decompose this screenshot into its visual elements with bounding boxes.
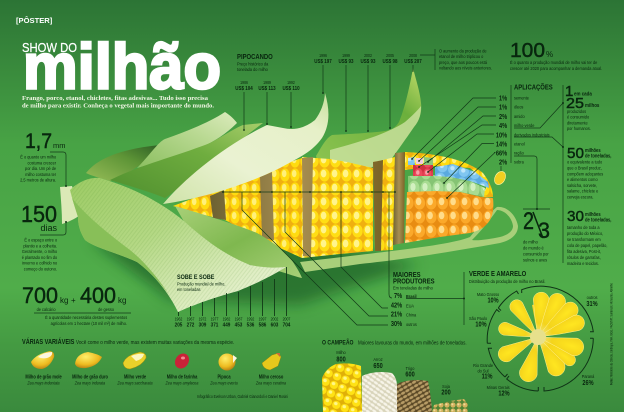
chart: maiores produtores: 21% <box>391 311 402 319</box>
section: o campeão: 650 <box>373 362 383 370</box>
kernel: pipoca: Pipoca <box>218 374 231 380</box>
kernel: grão mole: Zea mays indentata <box>26 380 60 386</box>
chart: pipocando price history: 2002 <box>364 53 372 58</box>
chart: pipocando price history: tonelada do milho <box>237 67 268 72</box>
chart: maiores produtores: 42% <box>391 302 402 310</box>
left fact: 150 dias: plantio e a colheita. <box>23 243 57 248</box>
loose kernel <box>492 169 508 187</box>
text: etanol note <box>420 48 492 71</box>
left fact: 150 dias: é plantado no fim do <box>22 254 58 260</box>
chart: pipocando price history: PIPOCANDO <box>237 53 273 61</box>
left fact: calcário e gesso: kg <box>60 296 68 305</box>
kernel: grão duro: Milho de grão duro <box>72 374 108 380</box>
fact: 1 em cada 25: por humanos. <box>567 126 591 131</box>
section: várias variáveis: VÁRIAS VARIÁVEIS <box>22 336 74 346</box>
chart: pipocando price history: US$ 93 <box>361 59 376 65</box>
fact: 50 milhões: cerveja escura. <box>567 194 593 200</box>
chart: sobe e sobe: 2002 <box>271 316 278 321</box>
fact: 30 milhões: produção do México, <box>567 231 603 236</box>
chart: sobe e sobe: em toneladas <box>177 287 201 292</box>
fact: 1 em cada 25: milhos <box>585 103 600 109</box>
leaf: upper <box>137 112 237 168</box>
kernel: milho verde: Zea mays saccharata <box>117 380 153 386</box>
left fact: 150 dias <box>21 201 67 272</box>
state labels: 31% <box>586 300 598 308</box>
chart: pipocando price history: 2005 <box>386 53 395 58</box>
left fact: 150 dias: É o espaço entre o <box>24 236 58 243</box>
chart: aplicações: 1% <box>499 95 507 103</box>
text: etanol note: preço, que aos poucos está <box>439 59 487 65</box>
stat: 100%: É o quanto a produção mundial de milho vai ter de <box>510 58 598 65</box>
chart: sobe e sobe: 1992 <box>247 316 254 321</box>
state labels: 26% <box>582 379 594 387</box>
state labels: Rio Grande <box>473 363 494 368</box>
chart: aplicações: óleos <box>514 104 524 110</box>
subtitle: Frango, porco, etanol, chicletes, fitas adesivas... Tudo isso precisa <box>22 95 208 102</box>
fact: 50 milhões: que o Brasil produz, <box>567 165 602 171</box>
fact: 30 milhões: de toneladas, <box>585 217 611 223</box>
colored section: kernels by use <box>405 152 493 197</box>
section: o campeão: Soja <box>442 384 450 389</box>
kernel: grão mole <box>25 351 62 386</box>
chart: maiores produtores: Em toneladas de milho <box>393 285 433 291</box>
chart: sobe e sobe: 704 <box>283 322 290 329</box>
left fact: calcário e gesso <box>22 283 131 326</box>
kernel: pipoca <box>209 354 238 386</box>
fact: 50 milhões: compõem adoçantes <box>567 171 604 176</box>
corn illustration <box>60 68 518 312</box>
stat: 2/3: do milho <box>523 239 538 245</box>
shadow <box>90 240 420 305</box>
chart: maiores produtores: outros <box>406 322 418 327</box>
husk strips <box>210 157 383 257</box>
leader lines <box>223 192 464 325</box>
chart: aplicações: amido <box>514 113 525 119</box>
chart: pipocando price history: US$ 110 <box>282 86 300 92</box>
left fact: 1,7 mm: mm <box>53 141 66 150</box>
chart: sobe e sobe: 309 <box>199 322 206 329</box>
section: várias variáveis: Você come o milho verde, mas existem muitas variações da mesma espécie. <box>76 340 234 346</box>
chart: maiores produtores: MAIORES <box>393 271 421 279</box>
fact: 30 milhões: milhões <box>585 212 601 217</box>
subtitle <box>22 95 214 110</box>
chart: sobe e sobe: 603 <box>271 322 278 329</box>
chart: pipocando price history: 1999 <box>342 53 351 58</box>
chart: maiores produtores: 7% <box>394 292 402 300</box>
chart: pipocando price history: 1992 <box>287 80 295 85</box>
section: várias variáveis <box>22 336 287 386</box>
state labels: 12% <box>498 390 510 398</box>
section: o campeão: Milho <box>336 350 346 355</box>
credits: Infográfico Evelson Urban, Gabriel Gianordoli e Daniel Rosini <box>197 395 288 399</box>
flower petals <box>495 290 587 384</box>
chart: aplicações: APLICAÇÕES <box>514 82 553 92</box>
chart: sobe e sobe: 1982 <box>223 316 230 321</box>
chart: sobe e sobe: 272 <box>187 322 194 329</box>
left fact: calcário e gesso: 700 <box>22 283 58 308</box>
left fact: 1,7 mm <box>20 130 67 187</box>
kernel: grão duro: Zea mays indurata <box>74 380 106 386</box>
chart: sobe e sobe: 586 <box>259 322 266 329</box>
pile: arroz <box>362 372 397 412</box>
left fact: 150 dias: dias <box>40 223 57 233</box>
chart: aplicações <box>411 82 564 209</box>
state labels: Minas Gerais <box>487 385 510 390</box>
pile: milho <box>322 363 362 412</box>
left fact: calcário e gesso: É a quantidade necessária destes suplementos <box>45 313 128 320</box>
left fact: 1,7 mm: 1,7 <box>25 130 52 153</box>
chart: pipocando price history: Preço histórico da <box>237 61 269 67</box>
fact: 50 milhões <box>567 146 611 200</box>
section: o campeão: Trigo <box>406 366 415 371</box>
text: etanol note: etanol de milho triplicou o <box>439 54 484 59</box>
state labels: São Paulo <box>469 316 488 321</box>
subtitle: de milho para existir. Conheça o vegetal mais importante do mundo. <box>22 102 214 110</box>
fact: 30 milhões: 30 <box>567 209 584 225</box>
radial ring <box>487 286 593 391</box>
chart: sobe e sobe: 453 <box>235 322 242 329</box>
fact: 1 em cada 25: diretamente <box>567 120 588 126</box>
left fact: 1,7 mm: por dia. Um pé de <box>25 166 57 171</box>
left fact: 1,7 mm: 2,5 metros de altura. <box>20 177 56 183</box>
chart: pipocando price history <box>235 53 422 132</box>
tag: pôster: [PÔSTER] <box>16 16 53 25</box>
chart: pipocando price history: US$ 113 <box>258 86 276 92</box>
left fact: calcário e gesso: kg <box>118 296 126 305</box>
state labels <box>469 292 598 398</box>
section: o campeão: O CAMPEÃO <box>322 339 354 347</box>
kernel: cerosa: Zea mays ceratina <box>255 380 287 386</box>
left fact: 150 dias: inverno e colhido no <box>22 260 58 266</box>
left fact: calcário e gesso: de gesso <box>98 307 114 312</box>
leaf: top pale husk <box>163 93 328 204</box>
kernel: farinha: Milho de farinha <box>167 374 198 380</box>
kernel: grão mole: Milho de grão mole <box>25 374 62 380</box>
chart: aplicações: 1% <box>499 104 507 112</box>
fact: 1 em cada 25: em cada <box>574 91 592 98</box>
section: o campeão: 200 <box>441 389 451 397</box>
left fact: calcário e gesso: de calcário <box>37 307 56 312</box>
state labels: 10% <box>475 321 487 329</box>
main title: milhão <box>23 30 221 102</box>
stat: 100%: 100 <box>510 40 545 62</box>
fact: 50 milhões: de toneladas, <box>585 153 611 159</box>
left fact: calcário e gesso: agrícolas em 1 hectare (10 mil m²) de milho. <box>51 321 127 326</box>
chart: aplicações: 4% <box>499 122 507 130</box>
title block <box>22 30 221 110</box>
chart: maiores produtores <box>222 191 465 328</box>
fact: 50 milhões: salsicha, sorvete, <box>567 182 597 188</box>
chart: sobe e sobe: 371 <box>211 322 218 329</box>
text: etanol note: voltando aos níveis anteriores. <box>439 65 492 71</box>
chart: pipocando price history: US$ 197 <box>314 59 332 65</box>
left fact: 1,7 mm: É o quanto um milho <box>20 153 57 160</box>
chart: verde e amarelo: VERDE E AMARELO <box>469 270 526 278</box>
kernel: cerosa <box>255 353 287 386</box>
stat: 100%: crescer até 2020 para acompanhar a demanda atual. <box>510 66 602 71</box>
kernel: pipoca: Zea mays everta <box>209 380 238 386</box>
chart: pipocando price history: 1989 <box>263 80 272 85</box>
chart: aplicações: derivados industriais <box>514 132 550 137</box>
chart: aplicações: 66% <box>496 150 507 158</box>
chart: sobe e sobe: 1987 <box>235 316 242 321</box>
state labels: 10% <box>487 297 499 305</box>
chart: sobe e sobe: Produção mundial de milho, <box>177 281 225 286</box>
stat: 2/3 <box>523 208 550 263</box>
left fact: 150 dias: 150 <box>21 201 57 227</box>
chart: aplicações: etanol <box>514 141 525 147</box>
state labels: 11% <box>482 373 493 381</box>
section: o campeão <box>322 339 468 412</box>
chart: maiores produtores: 30% <box>391 320 402 328</box>
fact: 1 em cada 25: 25 <box>566 95 584 112</box>
leaf: main front <box>70 178 286 312</box>
chart: aplicações: 2% <box>499 113 507 121</box>
stat: 2/3: consumido por <box>523 251 549 257</box>
stat: 2/3: suínos e aves <box>523 257 548 263</box>
chart: sobe e sobe: 449 <box>223 322 230 329</box>
fact: 50 milhões: 50 <box>567 146 584 162</box>
fact: 30 milhões: tamanho de toda a <box>567 225 600 230</box>
fact: 50 milhões: milhões <box>585 148 601 153</box>
fact: 50 milhões: e alimentos como <box>567 177 598 182</box>
chart: maiores produtores: PRODUTORES <box>393 278 435 286</box>
kernel: milho verde <box>117 352 153 386</box>
fact: 50 milhões: salame, chiclete e <box>567 188 599 194</box>
chart: sobe e sobe <box>175 267 290 329</box>
chart: sobe e sobe: 536 <box>247 322 254 329</box>
stat: 100%: % <box>546 50 553 59</box>
chart: sobe e sobe: 1997 <box>259 316 266 321</box>
leader lines <box>412 98 501 198</box>
left fact: 1,7 mm: costuma crescer <box>27 160 57 165</box>
leaf: back right <box>316 68 421 168</box>
chart: sobe e sobe: 2007 <box>283 316 290 321</box>
leaf: dark rear <box>86 145 160 181</box>
fact: 50 milhões: o equivalente a tudo <box>567 159 603 165</box>
fact: 30 milhões: fita adesiva, Post-it, <box>567 249 601 254</box>
fact: 30 milhões: se transformam em <box>567 237 601 242</box>
fact: 30 milhões: rótulos de garrafas, <box>567 255 601 260</box>
state labels: do Sul <box>477 368 489 373</box>
state labels: Paraná <box>582 374 595 379</box>
chart: verde e amarelo <box>464 270 598 398</box>
chart: pipocando price history: US$ 98 <box>383 59 398 65</box>
chart: sobe e sobe: 205 <box>175 322 182 329</box>
chart: aplicações: 2% <box>499 159 507 167</box>
chart: sobe e sobe: 1977 <box>211 316 218 321</box>
fact: 1 em cada 25: é consumido <box>567 114 590 120</box>
source note: Fonte: Ministério da Ciência, Embrapa, IMA, IBGE, FAOSTAT, Sumbrasil, Monsanto, Abimilho <box>608 283 614 385</box>
right column facts <box>563 83 611 266</box>
ear of corn <box>173 152 493 258</box>
fact: 1 em cada 25: 1 <box>565 83 573 100</box>
chart: pipocando price history: US$ 104 <box>235 86 253 92</box>
chart: verde e amarelo: Distribuição da produção de milho no Brasil. <box>469 279 545 284</box>
kernel: farinha: Zea mays amylacea <box>165 380 199 386</box>
leaf: lower cover <box>175 206 302 278</box>
stat: 2/3: do mundo é <box>523 245 544 251</box>
left fact: calcário e gesso: 400 <box>80 283 116 308</box>
left fact: 150 dias: Geralmente, o milho <box>22 249 58 254</box>
left fact: 150 dias: começo do outono. <box>24 266 57 272</box>
kernel: farinha <box>165 351 199 386</box>
kernel: grão duro <box>72 352 108 386</box>
chart: pipocando price history: 2008 <box>409 53 418 58</box>
chart: aplicações: 10% <box>496 132 507 140</box>
state labels: outros <box>587 295 598 300</box>
chart: sobe e sobe: 1962 <box>175 316 182 321</box>
title kicker: SHOW DO <box>22 40 77 55</box>
state labels: Mato Grosso <box>477 292 500 297</box>
fact: 30 milhões: madeira e tecidos. <box>567 261 599 266</box>
chart: pipocando price history: 1986 <box>240 80 249 85</box>
kernel: cerosa: Milho ceroso <box>259 374 284 380</box>
chart: maiores produtores: China <box>406 312 417 318</box>
fact: 1 em cada 25 <box>565 83 600 131</box>
chart: pipocando price history: US$ 207 <box>404 59 422 65</box>
kernel: milho verde: Milho verde <box>124 374 147 380</box>
leaf: front left fold <box>72 198 170 296</box>
text: etanol note: O aumento da produção de <box>439 48 487 54</box>
left fact: calcário e gesso: + <box>71 296 76 305</box>
section: o campeão: Arroz <box>373 357 383 362</box>
section: o campeão: Maiores lavouras do mundo, em milhões de toneladas. <box>358 340 467 347</box>
pile: soja <box>432 399 468 412</box>
pile: trigo <box>397 380 432 412</box>
chart: maiores produtores: Brasil <box>406 294 417 299</box>
chart: pipocando price history: 1996 <box>319 53 328 58</box>
section: o campeão: 800 <box>336 356 346 364</box>
section: o campeão: 600 <box>405 371 415 379</box>
fact: 30 milhões <box>567 209 611 266</box>
chart: pipocando price history: US$ 93 <box>339 59 354 65</box>
chart: aplicações: sobra <box>514 159 524 165</box>
stat: 100% <box>510 40 602 71</box>
stat: 2/3: 2 <box>523 208 534 235</box>
fact: 30 milhões: cola de papel, papelão, <box>567 243 607 248</box>
chart: sobe e sobe: 1967 <box>187 316 194 321</box>
left fact: 1,7 mm: milho costuma ter <box>25 171 57 177</box>
chart: sobe e sobe: SOBE E SOBE <box>177 273 214 281</box>
chart: aplicações: semente <box>514 95 529 101</box>
stat: 2/3: 3 <box>538 218 550 243</box>
chart: sobe e sobe: 1972 <box>199 316 206 321</box>
leaf: middle <box>110 123 263 198</box>
chart: aplicações: ração <box>514 150 524 156</box>
fact: 1 em cada 25: produzidos <box>567 109 587 114</box>
leaf: base <box>300 207 518 272</box>
leaf: pale tab <box>60 186 80 224</box>
chart: aplicações: 14% <box>496 141 507 149</box>
chart: aplicações: milho-verde <box>514 123 535 128</box>
chart: maiores produtores: EUA <box>406 303 414 309</box>
